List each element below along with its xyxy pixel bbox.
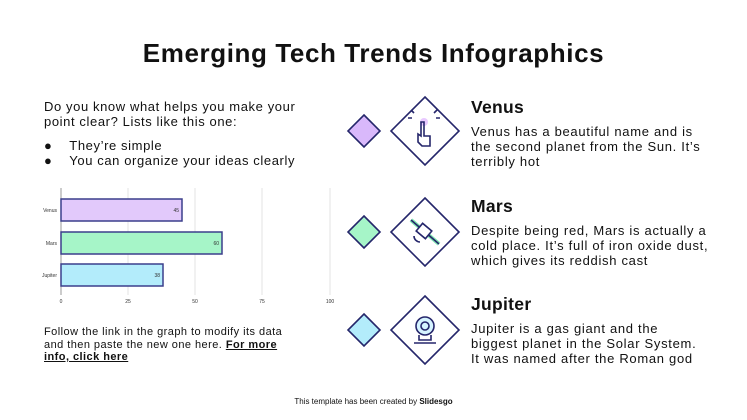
item: Venus: Venus has a beautiful name and is xyxy=(471,124,693,139)
footnote text: and then paste the new one here. For more xyxy=(44,338,277,350)
bar chart: 100 xyxy=(326,299,334,305)
item: Jupiter: Jupiter xyxy=(471,294,531,314)
bar chart: Jupiter xyxy=(42,273,57,279)
intro text: point clear? Lists like this one: xyxy=(44,114,237,129)
footnote text: info, click here xyxy=(44,351,128,363)
title: Emerging Tech Trends Infographics xyxy=(143,38,604,68)
item: Jupiter: Jupiter is a gas giant and the xyxy=(471,321,658,336)
icon: venus diamonds xyxy=(348,97,459,165)
diamonds and icons xyxy=(347,96,460,365)
item: Venus xyxy=(471,97,700,169)
icon: mars diamonds xyxy=(348,198,459,266)
bar chart: 50 xyxy=(192,299,198,305)
footnote text xyxy=(44,326,282,363)
item: Mars: cold place. It’s full of iron oxide dust, xyxy=(471,238,708,253)
footnote text: Follow the link in the graph to modify its data xyxy=(44,326,282,338)
bar chart: Mars xyxy=(46,241,57,247)
credit: This template has been created by Slidesgo xyxy=(294,397,453,406)
item: Jupiter: It was named after the Roman god xyxy=(471,351,693,366)
item: Mars: Despite being red, Mars is actually a xyxy=(471,223,706,238)
item: Venus: the second planet from the Sun. It’s xyxy=(471,139,700,154)
intro text xyxy=(44,99,295,168)
item: Mars xyxy=(471,196,708,268)
intro text: Do you know what helps you make your xyxy=(44,99,295,114)
item: Jupiter xyxy=(471,294,696,366)
bar chart: 75 xyxy=(259,299,265,305)
bullet list: ● They’re simple xyxy=(44,138,162,153)
item: Venus: terribly hot xyxy=(471,154,540,169)
bar chart: 38 xyxy=(154,273,160,279)
bar chart: 45 xyxy=(173,208,179,214)
item: Mars: which gives its reddish cast xyxy=(471,253,648,268)
item: Mars: Mars xyxy=(471,196,513,216)
bullet list: ● You can organize your ideas clearly xyxy=(44,153,295,168)
bar chart: Venus xyxy=(43,208,57,214)
icon: jupiter diamonds xyxy=(348,296,459,364)
bar chart: 60 xyxy=(213,241,219,247)
bullet list xyxy=(44,138,295,168)
bar chart: 25 xyxy=(125,299,131,305)
bar chart xyxy=(42,188,334,305)
item: Venus: Venus xyxy=(471,97,524,117)
item: Jupiter: biggest planet in the Solar System. xyxy=(471,336,696,351)
bar chart: 0 xyxy=(60,299,63,305)
